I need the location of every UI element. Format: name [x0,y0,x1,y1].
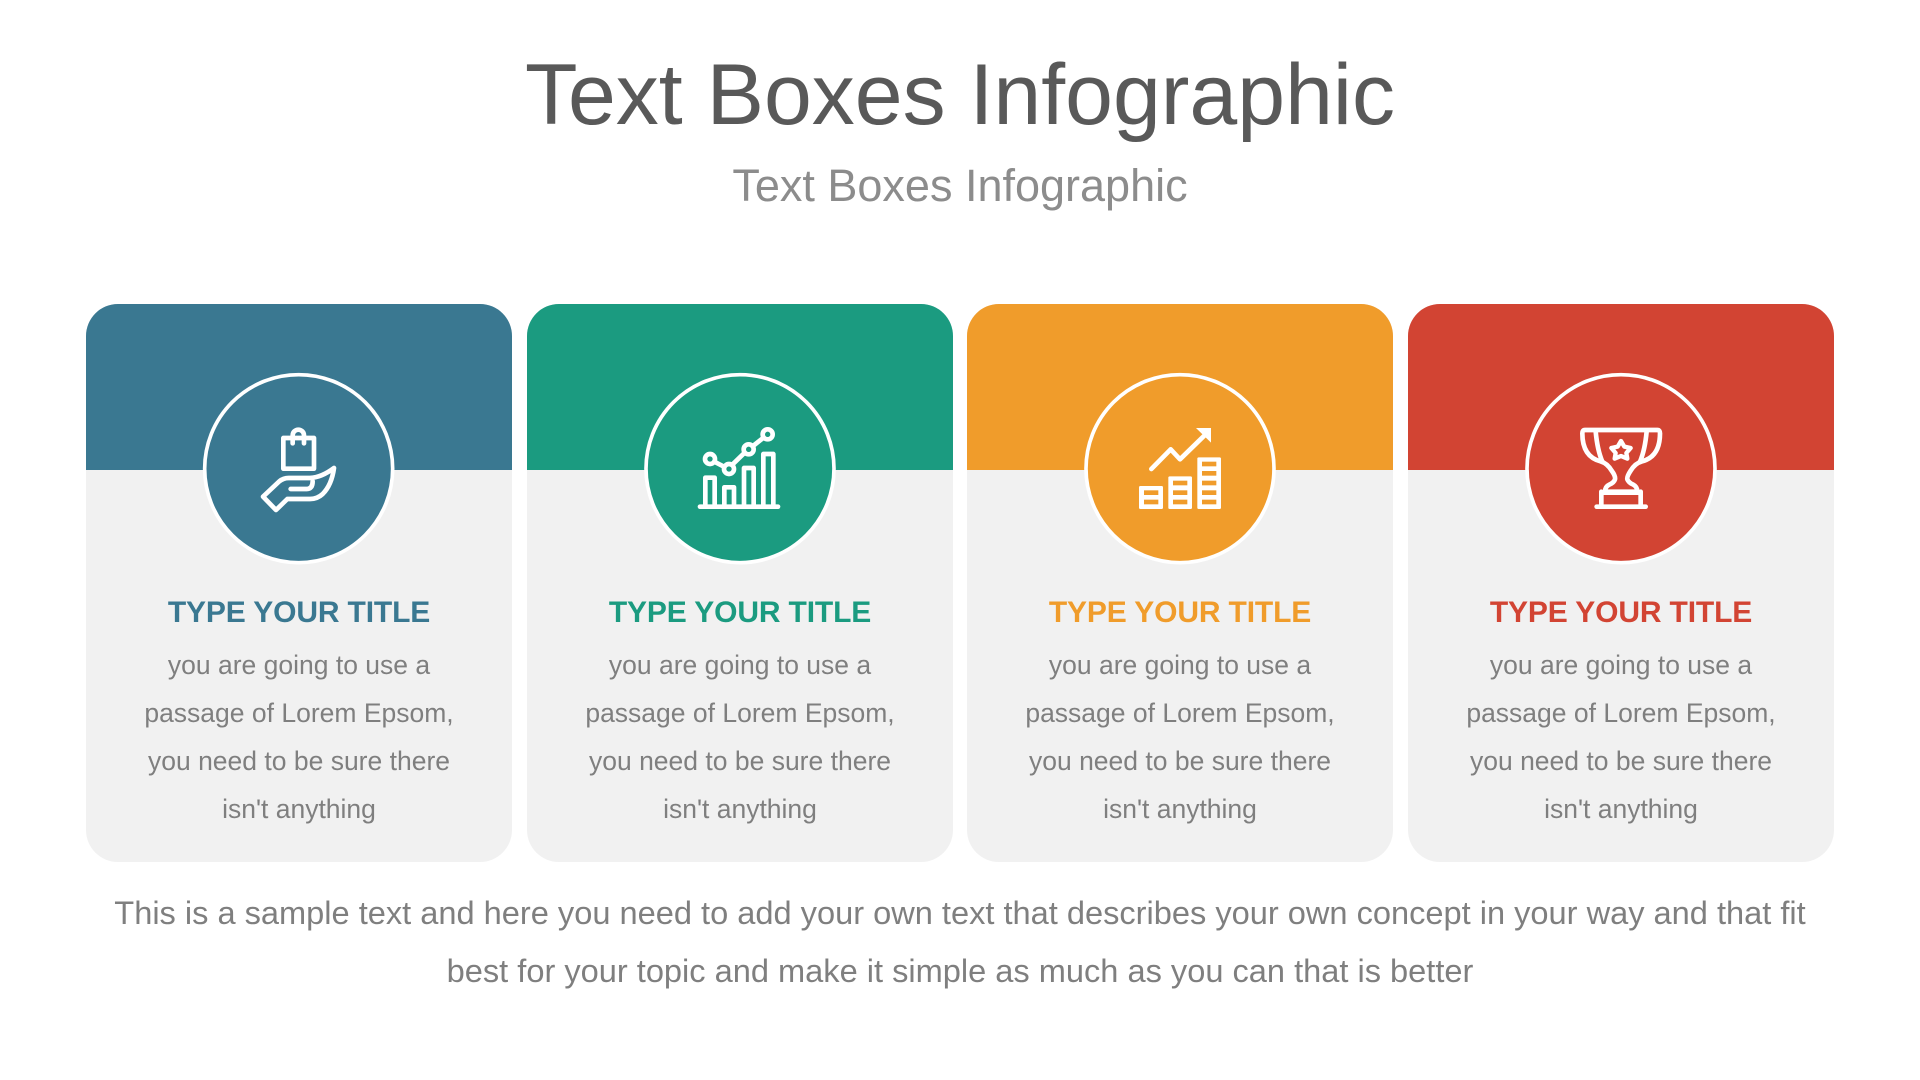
footer text: This is a sample text and here you need to add your own text that describes your own concept in your way and that fit [114,894,1806,931]
card 3 body text: you need to be sure there [1029,746,1331,776]
panel: card 1 [86,304,512,862]
subtitle: Text Boxes Infographic [732,160,1188,211]
panel: card 4 [1408,304,1834,862]
card 2 body text [585,650,895,824]
panel: card 2 [527,304,953,862]
icon: trophy with star [1527,375,1715,563]
card 2 body text: you are going to use a [609,650,871,680]
card 1 body text [144,650,454,824]
card 1 body text: you are going to use a [168,650,430,680]
card 4 body text: isn't anything [1544,794,1698,824]
card 4 body text [1466,650,1776,824]
card 3 body text: you are going to use a [1049,650,1311,680]
card 2 body text: isn't anything [663,794,817,824]
footer text [114,894,1806,989]
card 3 body text [1025,650,1335,824]
card 4 body text: you need to be sure there [1470,746,1772,776]
card 1 header band [86,304,512,470]
card 2 title: TYPE YOUR TITLE [609,596,871,629]
icon: rising coin stacks with arrow [1086,375,1274,563]
card 3 title: TYPE YOUR TITLE [1049,596,1311,629]
card 2 body text: passage of Lorem Epsom, [585,698,895,728]
icon: hand holding shopping bag [205,375,393,563]
card 1 body text: you need to be sure there [148,746,450,776]
card 4 header band [1408,304,1834,470]
card 3 body text: isn't anything [1103,794,1257,824]
card 1 body text: passage of Lorem Epsom, [144,698,454,728]
card 3 body text: passage of Lorem Epsom, [1025,698,1335,728]
card 4 body text: you are going to use a [1490,650,1752,680]
card 3 header band [967,304,1393,470]
footer text: best for your topic and make it simple as much as you can that is better [447,952,1473,989]
panel: card 3 [967,304,1393,862]
card 1 title: TYPE YOUR TITLE [168,596,430,629]
title: Text Boxes Infographic [525,47,1395,143]
card 1 body text: isn't anything [222,794,376,824]
icon: bar chart with trend line [646,375,834,563]
card 4 title: TYPE YOUR TITLE [1490,596,1752,629]
card 4 body text: passage of Lorem Epsom, [1466,698,1776,728]
card 2 header band [527,304,953,470]
card 2 body text: you need to be sure there [589,746,891,776]
